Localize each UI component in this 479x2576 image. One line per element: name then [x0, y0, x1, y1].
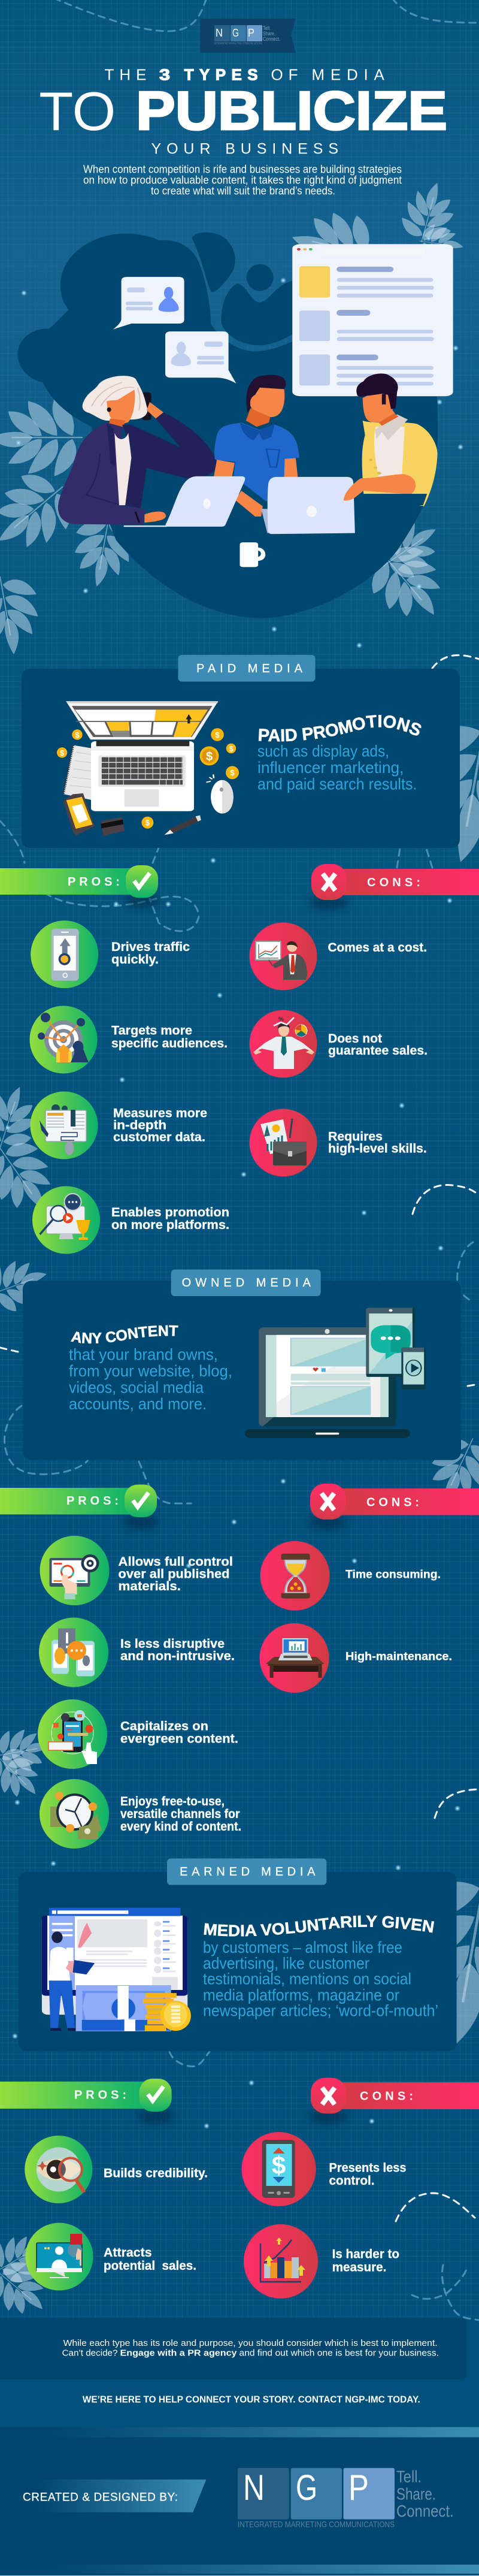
owned media text	[69, 1346, 232, 1413]
icon: laptop on desk	[266, 1638, 325, 1678]
owned media devices illustration	[245, 1307, 426, 1438]
earned media illustration	[42, 1908, 191, 2031]
header logo: P	[248, 27, 254, 39]
coins: $	[60, 748, 65, 757]
icon: tablet target hand	[49, 1554, 99, 1599]
pros header: owned	[0, 1485, 159, 1529]
pro: builds credibility	[25, 2136, 208, 2203]
con: harder to measure: measure.	[332, 2261, 386, 2275]
con: comes at a cost	[249, 923, 427, 990]
pro: enables promotion: on more platforms.	[111, 1218, 229, 1232]
owned media text: from your website, blog,	[69, 1362, 232, 1380]
cons header: earned: CONS:	[360, 2090, 413, 2103]
header logo: Share.	[263, 31, 275, 37]
pro: free-to-use channels: every kind of content.	[120, 1820, 241, 1834]
intro paragraph: to create what will suit the brand’s needs.	[151, 185, 335, 197]
footer logo: Connect.	[396, 2502, 454, 2520]
laptops	[124, 476, 355, 534]
icon: briefcase and report	[260, 1119, 307, 1165]
header logo: INTEGRATED MARKETING COMMUNICATIONS	[214, 42, 262, 46]
icon: rising bar chart	[260, 2237, 305, 2282]
footer logo: Share.	[396, 2484, 436, 2503]
closing panel	[0, 2318, 466, 2379]
pro: free-to-use channels: Enjoys free-to-use,	[120, 1795, 225, 1808]
pro: targets: specific audiences.	[111, 1037, 228, 1050]
owned media text: accounts, and more.	[69, 1395, 207, 1413]
created by banner	[18, 2480, 206, 2512]
closing panel: Can’t decide?	[62, 2348, 117, 2358]
earned media text: by customers – almost like free	[203, 1938, 402, 1956]
con: requires skills	[249, 1109, 427, 1177]
section tag: owned media: OWNED MEDIA	[182, 1276, 311, 1289]
footer logo	[238, 2468, 454, 2529]
pro: targets	[30, 1005, 228, 1074]
footer logo: INTEGRATED MARKETING COMMUNICATIONS	[238, 2520, 395, 2529]
con: comes at a cost: Comes at a cost.	[328, 941, 427, 955]
header logo: G	[232, 27, 239, 39]
icon: target and darts	[38, 1013, 89, 1062]
pros header: earned: PROS:	[74, 2089, 126, 2102]
earned media text: media platforms, magazine or	[203, 1986, 399, 2004]
created by banner: CREATED & DESIGNED BY:	[23, 2491, 178, 2503]
paid media text: influencer marketing,	[257, 759, 404, 777]
browser window card	[292, 244, 453, 396]
pro: evergreen content: evergreen content.	[120, 1732, 238, 1745]
title: MEDIA	[311, 65, 385, 83]
paid media text: and paid search results.	[257, 775, 417, 793]
cons header: owned	[308, 1484, 479, 1529]
closing panel: Engage with a PR agency	[120, 2348, 237, 2358]
chat card right	[165, 331, 236, 383]
pros header: paid	[0, 865, 160, 907]
section tag: owned media	[23, 1270, 461, 1460]
pro: measures data	[30, 1092, 207, 1159]
pro: full control: over all published	[119, 1568, 230, 1581]
pro: drives traffic	[31, 920, 190, 988]
hero illustration	[18, 232, 453, 618]
footer logo: Tell.	[396, 2468, 422, 2486]
con: time consuming	[260, 1541, 441, 1611]
owned media text: videos, social media	[69, 1379, 204, 1397]
pro: free-to-use channels: versatile channels for	[120, 1807, 240, 1821]
icon: phone with dollar	[262, 2140, 295, 2198]
pro: free-to-use channels	[40, 1779, 241, 1849]
earned media text: advertising, like customer	[203, 1955, 369, 1973]
woman with phone	[58, 376, 217, 525]
coins: $	[145, 819, 150, 827]
man in yellow cardigan	[344, 373, 438, 506]
sparkles	[5, 235, 463, 2129]
pro: full control: materials.	[119, 1580, 181, 1593]
title: TO	[39, 81, 116, 142]
icon: document and mouse	[40, 1104, 86, 1155]
icon: monitor search trophy	[40, 1193, 90, 1240]
pro: attracts sales: potential sales.	[104, 2259, 196, 2273]
section tag: earned media	[19, 1859, 457, 2052]
coins	[57, 728, 239, 829]
coins: $	[75, 730, 80, 739]
con: presents less control: Presents less	[329, 2161, 406, 2175]
con: does not guarantee sales: guarantee sales.	[328, 1044, 428, 1058]
coins: $	[215, 730, 220, 739]
icon: phones with alert bubble	[51, 1629, 95, 1677]
con: high maintenance	[260, 1623, 452, 1693]
closing panel: and find out which one is best for your business.	[240, 2348, 439, 2358]
header logo: Tell.	[263, 25, 271, 31]
icon: phone with arrow	[51, 929, 79, 981]
header logo: N	[216, 27, 223, 39]
coins: $	[229, 744, 234, 753]
icon: hourglass	[281, 1554, 310, 1599]
paid promotions heading: PAID PROMOTIONS	[259, 715, 422, 742]
con: presents less control: control.	[329, 2174, 375, 2188]
cons header: earned	[309, 2078, 479, 2124]
background blob	[18, 232, 438, 618]
pro: enables promotion	[32, 1186, 229, 1254]
con: time consuming: Time consuming.	[345, 1569, 441, 1581]
paid media laptop illustration	[63, 701, 234, 836]
pro: full control: Allows full control	[119, 1555, 233, 1569]
pro: less disruptive	[39, 1618, 235, 1687]
owned media text: that your brand owns,	[69, 1346, 218, 1364]
pro: attracts sales	[25, 2223, 196, 2290]
intro paragraph: When content competition is rife and businesses are building strategies	[83, 164, 402, 176]
header logo: Connect.	[263, 36, 280, 42]
icon: shrugging businessman	[253, 1016, 314, 1069]
pros header: owned: PROS:	[66, 1494, 119, 1508]
pro: evergreen content: Capitalizes on	[120, 1720, 208, 1734]
con: requires skills: Requires	[328, 1130, 383, 1143]
title: TYPES	[184, 65, 258, 83]
pro: drives traffic: quickly.	[111, 953, 159, 967]
chat card left	[113, 277, 184, 330]
intro paragraph	[83, 164, 402, 197]
con: harder to measure	[244, 2224, 399, 2299]
con: presents less control	[242, 2132, 406, 2206]
con: does not guarantee sales: Does not	[328, 1032, 382, 1046]
con: harder to measure: Is harder to	[332, 2248, 399, 2261]
icon: presenter with chart	[256, 941, 307, 980]
mug	[240, 542, 265, 567]
footer logo: N	[243, 2468, 265, 2508]
pro: measures data: customer data.	[113, 1130, 205, 1144]
section tag: earned media: EARNED MEDIA	[180, 1865, 316, 1879]
earned media text: newspaper articles; ‘word-of-mouth’	[203, 2002, 438, 2020]
media voluntarily given heading: MEDIA VOLUNTARILY GIVEN	[204, 1915, 435, 1937]
title: PUBLICIZE	[136, 81, 447, 141]
title	[39, 65, 447, 157]
paid media text: such as display ads,	[257, 742, 389, 760]
coins: $	[206, 750, 213, 763]
cons header: owned: CONS:	[366, 1496, 419, 1509]
pro: targets: Targets more	[111, 1024, 192, 1038]
con: requires skills: high-level skills.	[328, 1142, 427, 1156]
pro: measures data: Measures more	[113, 1106, 207, 1121]
icon: monitor with cart	[37, 2234, 82, 2278]
intro paragraph: on how to produce valuable content, it takes the right kind of judgment	[83, 174, 402, 186]
pro: less disruptive: and non-intrusive.	[120, 1650, 235, 1663]
footer logo: P	[348, 2468, 369, 2508]
pro: measures data: in-depth	[113, 1118, 166, 1133]
earned media text	[203, 1938, 438, 2020]
pro: evergreen content	[38, 1699, 238, 1769]
footer band	[0, 2427, 479, 2576]
title: 3	[159, 65, 170, 83]
pro: attracts sales: Attracts	[104, 2246, 152, 2260]
earned media text: testimonials, mentions on social	[203, 1970, 411, 1988]
icon: phone with apps	[48, 1710, 97, 1764]
header logo	[200, 19, 296, 53]
cons header: paid	[310, 864, 479, 910]
cons header: paid: CONS:	[367, 876, 420, 889]
footer logo: G	[296, 2468, 317, 2508]
title: YOUR BUSINESS	[151, 140, 338, 157]
con: does not guarantee sales	[249, 1010, 428, 1077]
man in blue shirt	[214, 375, 299, 517]
pros header: earned	[0, 2079, 174, 2124]
pro: enables promotion: Enables promotion	[111, 1206, 229, 1219]
icon: clock and money	[50, 1792, 102, 1839]
pros header: paid: PROS:	[68, 875, 120, 889]
pro: drives traffic: Drives traffic	[111, 940, 190, 954]
any content heading: ANY CONTENT	[71, 1325, 178, 1343]
icon: eye and magnifier	[37, 2148, 84, 2192]
con: high maintenance: High-maintenance.	[345, 1651, 452, 1663]
closing panel: While each type has its role and purpose, you should consider which is best to implement.	[63, 2338, 438, 2348]
call to action: WE’RE HERE TO HELP CONNECT YOUR STORY. CONTACT NGP-IMC TODAY.	[83, 2394, 420, 2405]
title: OF	[271, 65, 298, 83]
pro: builds credibility: Builds credibility.	[104, 2167, 208, 2181]
paid media text	[257, 742, 417, 793]
icon: phone with dollar: $	[272, 2151, 286, 2179]
section tag: paid media	[22, 655, 460, 848]
pro: less disruptive: Is less disruptive	[120, 1637, 225, 1651]
pro: full control	[40, 1536, 233, 1605]
title: THE	[104, 65, 146, 83]
section tag: paid media: PAID MEDIA	[196, 662, 303, 675]
coins: $	[230, 768, 235, 777]
icon: shrugging businessman: %	[278, 1016, 284, 1023]
